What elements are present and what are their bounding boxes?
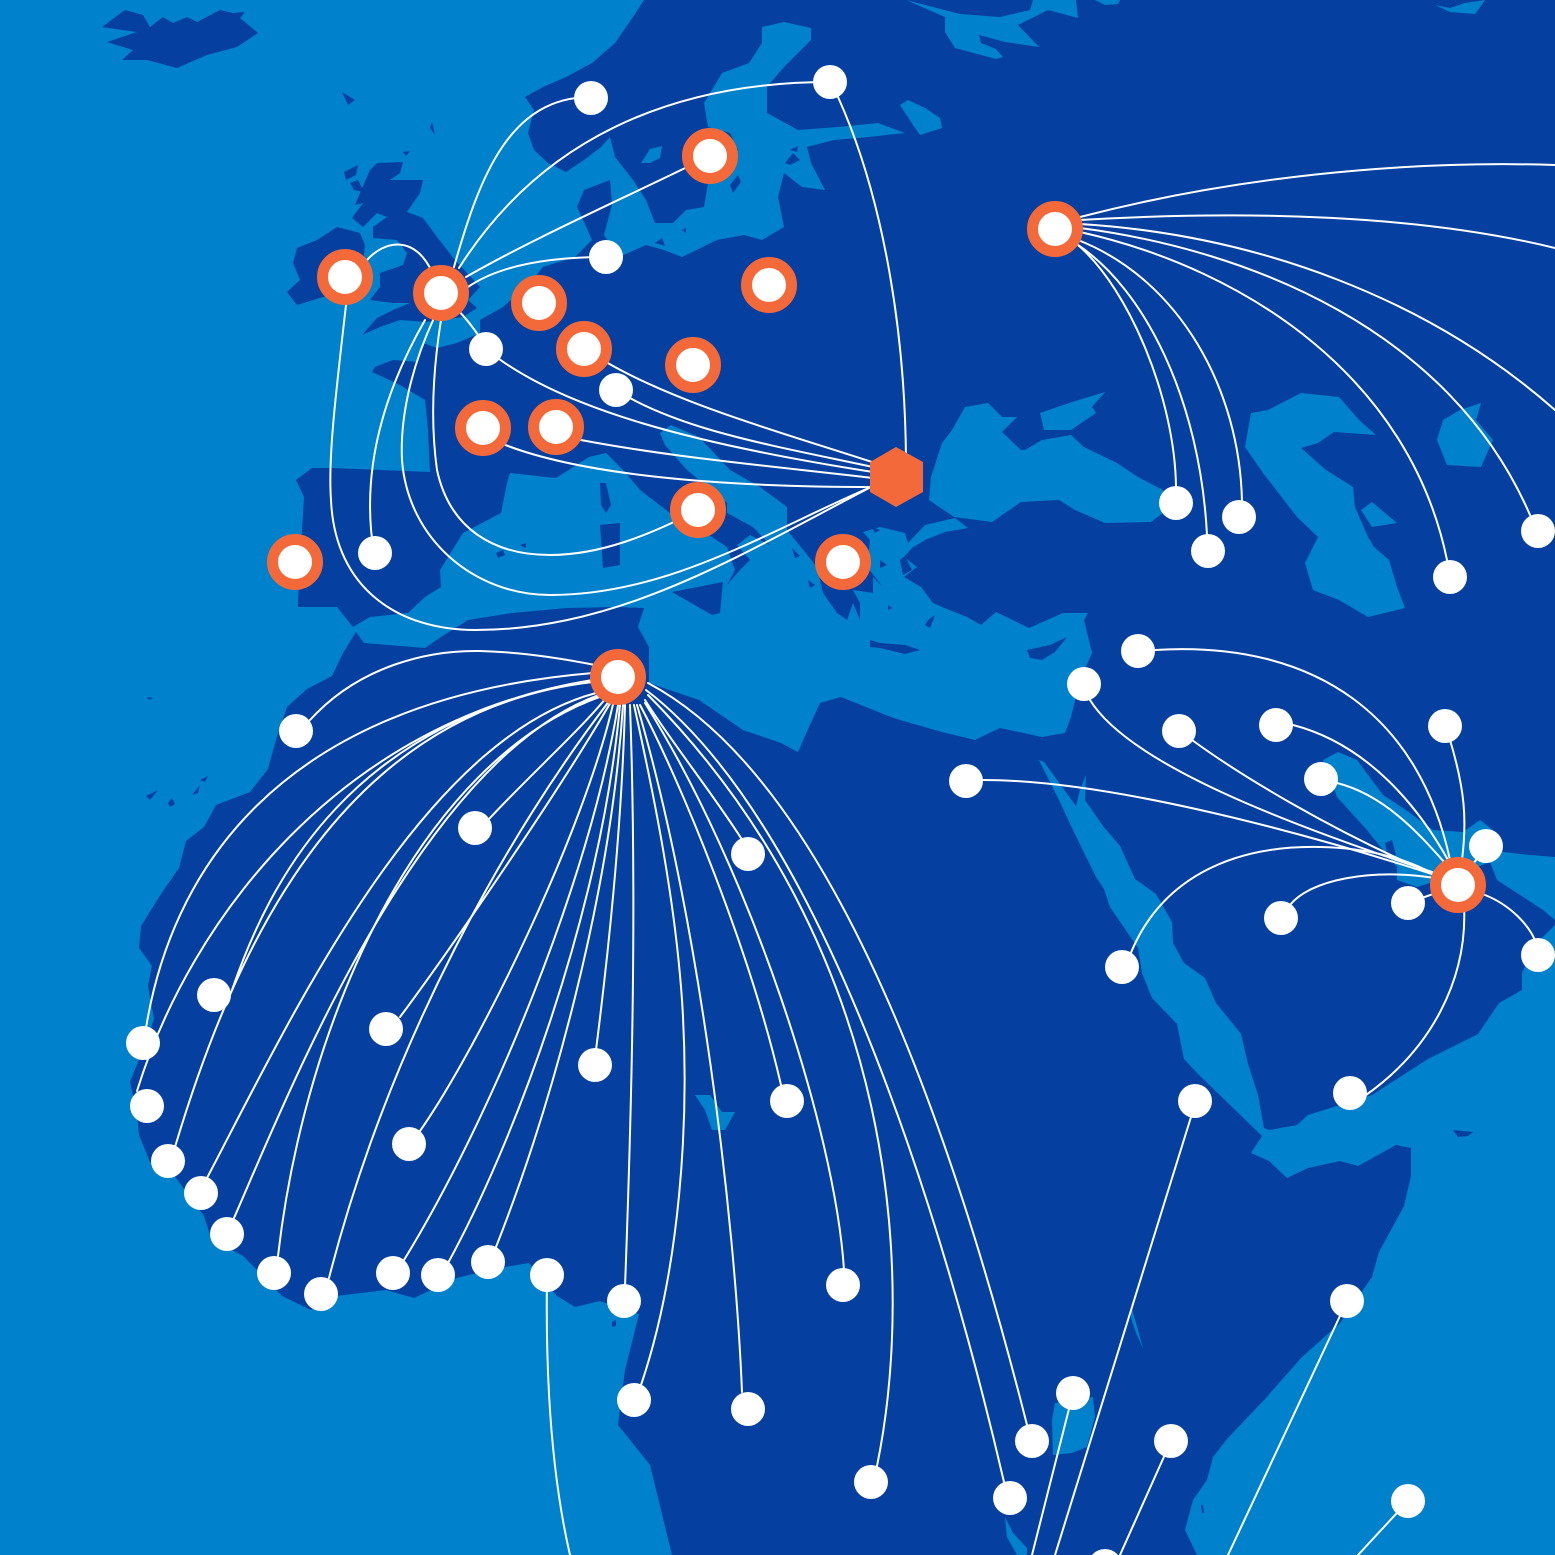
Zanzibar — [1201, 1505, 1204, 1513]
Lake Ladoga — [900, 100, 942, 135]
Lake Vanern — [641, 146, 662, 163]
Aral Sea — [1437, 403, 1493, 467]
Ireland — [287, 227, 365, 305]
routes: leaving the frame at the bottom — [547, 1117, 1408, 1555]
Sea of Azov — [1040, 392, 1105, 430]
Baltic islands — [655, 146, 800, 246]
Great Britain — [352, 162, 480, 335]
Atlantic, North Sea, Baltic and Mediterranean — [0, 0, 1092, 1555]
Black Sea — [929, 403, 1167, 523]
routes: Moscow hub — [1078, 164, 1555, 560]
Crete — [870, 640, 920, 654]
Garabogaz bay — [1361, 502, 1397, 527]
orange hub rings — [272, 134, 1480, 908]
routes: Dublin — [330, 245, 871, 630]
Sicily — [672, 582, 723, 615]
Lake Turkana — [1131, 1305, 1143, 1348]
Caspian Sea — [1245, 393, 1405, 617]
routes: Tunis hub — [137, 651, 1027, 1482]
Socotra — [1453, 1130, 1473, 1137]
Corsica — [600, 483, 611, 513]
Persian Gulf and Gulf of Oman — [1323, 752, 1555, 920]
Red Sea, Gulf of Aden and Indian Ocean — [1039, 760, 1555, 1555]
Lake Chad — [695, 1095, 735, 1130]
Iceland — [102, 10, 258, 68]
White Sea — [906, 0, 1078, 59]
Lake Victoria — [1052, 1397, 1095, 1455]
orange hexagon hub — [870, 447, 923, 507]
Canary Islands and Madeira — [146, 697, 208, 807]
routes: into hexagon hub — [483, 97, 906, 487]
Qatar — [1385, 840, 1396, 858]
routes: London hub — [370, 82, 871, 595]
Bioko — [612, 1320, 616, 1327]
Cyprus — [1027, 637, 1067, 660]
Lake Tanganyika — [1005, 1517, 1027, 1555]
Balearic Islands — [496, 543, 526, 558]
routes: Dubai hub — [983, 649, 1537, 1095]
Aegean islands — [792, 527, 935, 628]
Scottish isles — [342, 92, 435, 192]
northern inlets — [1095, 0, 1485, 14]
Sardinia — [600, 523, 620, 568]
